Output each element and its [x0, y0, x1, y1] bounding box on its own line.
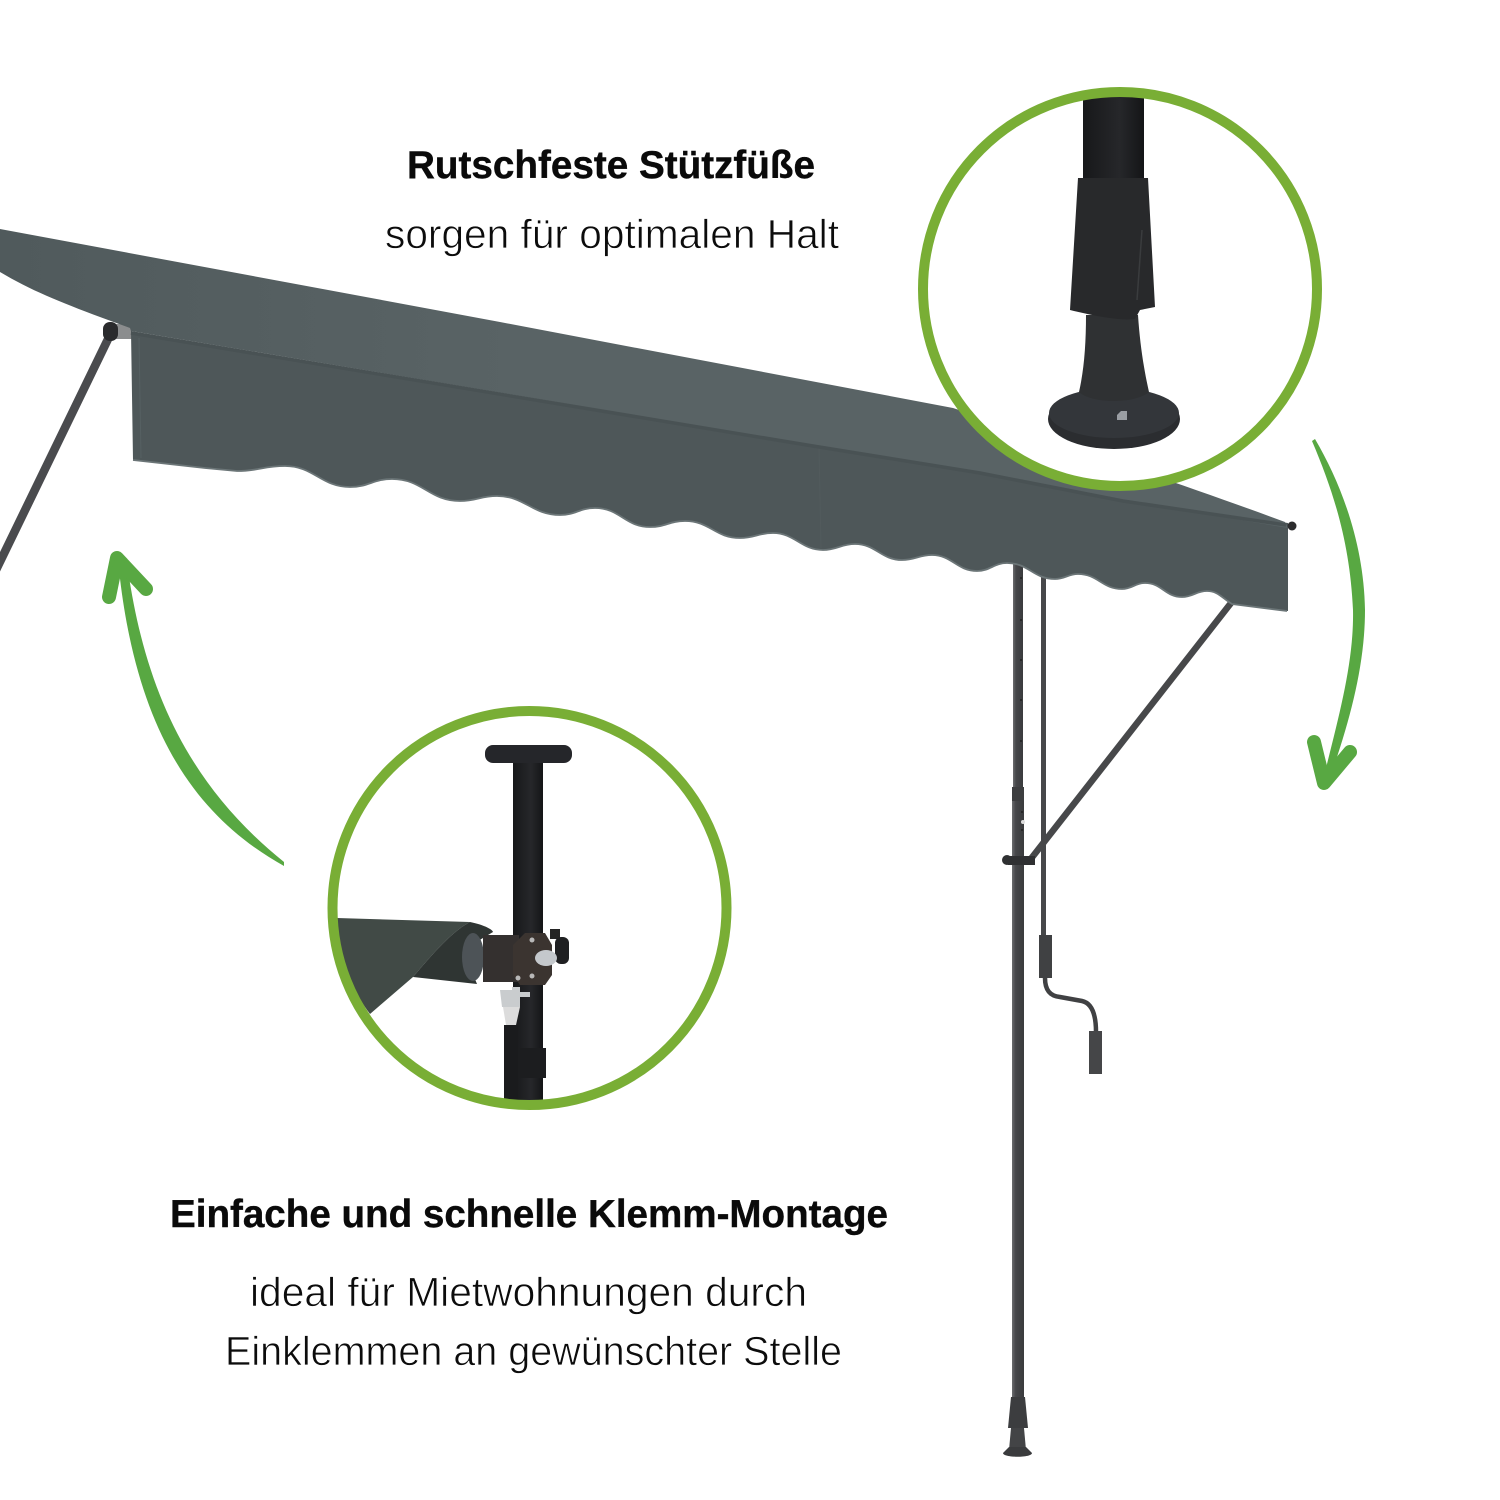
arrow: down right	[1309, 439, 1365, 790]
awning valance	[131, 331, 1288, 611]
text block: anti-slip feet	[385, 144, 840, 257]
circle detail: anti-slip foot	[923, 85, 1317, 486]
support pole with foot	[1003, 560, 1032, 1457]
awning top surface	[0, 229, 1296, 530]
crank rod and handle	[1039, 572, 1102, 1074]
text block: anti-slip feet: Rutschfeste Stützfüße	[407, 144, 815, 187]
arrow: up left	[103, 552, 284, 866]
left diagonal arm with joint	[0, 322, 132, 570]
text block: clamp mounting	[170, 1193, 888, 1374]
text block: clamp mounting: Einfache und schnelle Klemm-Montage	[170, 1193, 888, 1236]
right diagonal arm with bracket	[1002, 603, 1231, 865]
text block: anti-slip feet: sorgen für optimalen Halt	[385, 211, 840, 257]
circle detail: clamp mounting	[332, 711, 726, 1115]
text block: clamp mounting: Einklemmen an gewünschter Stelle	[225, 1328, 842, 1374]
text block: clamp mounting: ideal für Mietwohnungen durch	[250, 1269, 807, 1315]
